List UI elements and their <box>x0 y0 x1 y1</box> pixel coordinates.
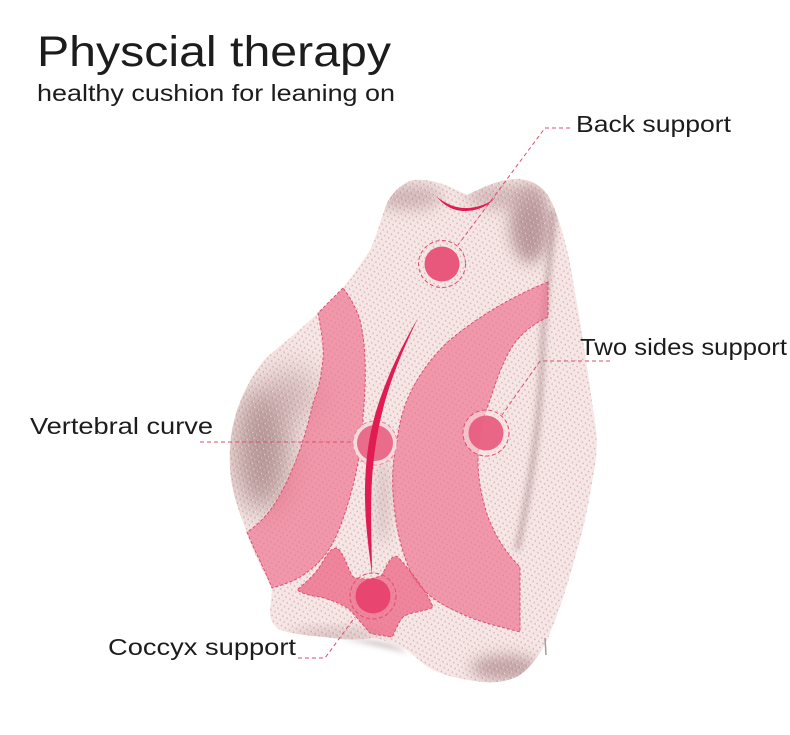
two sides point <box>463 410 509 456</box>
vertebral point <box>353 421 397 465</box>
leader: coccyx support <box>298 617 355 658</box>
leader: two sides support <box>502 361 610 415</box>
back support point <box>418 240 466 288</box>
leader: vertebral curve <box>200 441 352 443</box>
label: coccyx support: Coccyx support <box>108 634 297 660</box>
label: vertebral curve: Vertebral curve <box>30 413 213 439</box>
coccyx point <box>350 573 396 619</box>
leader: back support <box>458 128 570 245</box>
cushion illustration <box>220 170 605 690</box>
coccyx pink shape <box>297 548 433 637</box>
title: Physcial therapy <box>37 28 392 76</box>
spine curve <box>365 318 418 575</box>
label: back support: Back support <box>576 111 732 137</box>
zipper tab <box>545 638 546 655</box>
top arc <box>437 197 495 211</box>
cushion body <box>220 170 605 690</box>
floor shadow <box>340 638 407 653</box>
right pink band <box>393 282 548 632</box>
left pink band <box>247 288 365 588</box>
label: two sides support: Two sides support <box>580 334 788 360</box>
subtitle: healthy cushion for leaning on <box>37 80 395 106</box>
